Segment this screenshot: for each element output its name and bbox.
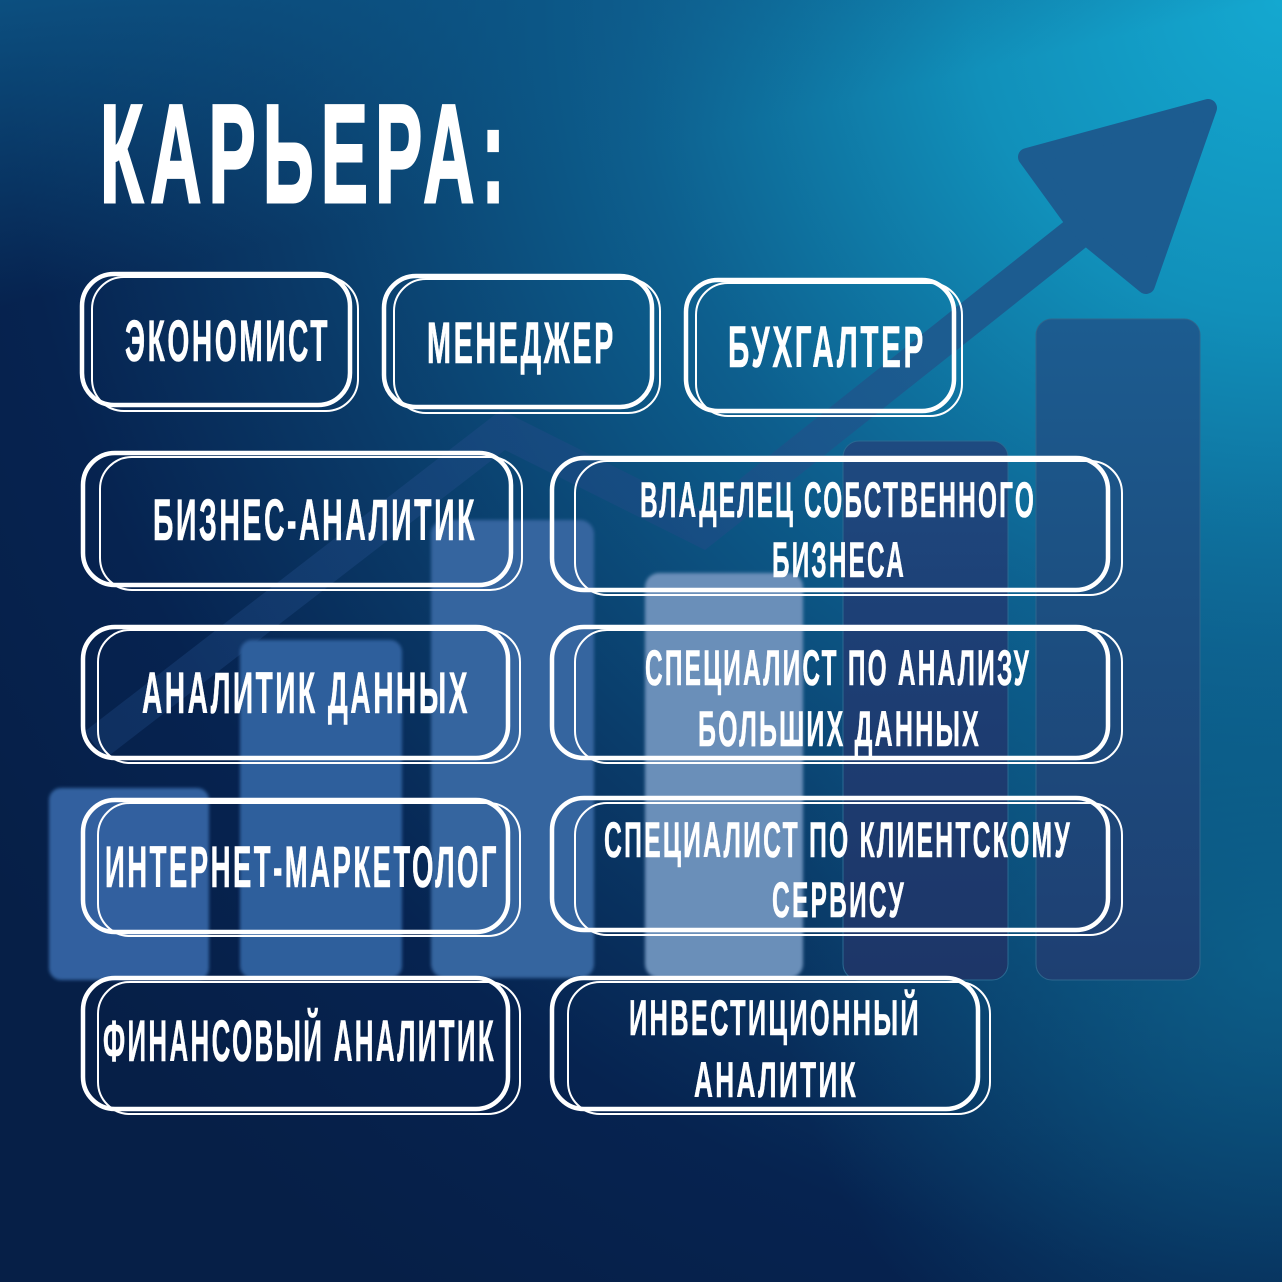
card: экономист (82, 274, 358, 411)
bar 1 (49, 788, 209, 980)
card: специалист по анализу больших данных: БОЛЬШИХ ДАННЫХ (698, 701, 981, 757)
card: инвестиционный аналитик: ИНВЕСТИЦИОННЫЙ (629, 989, 921, 1046)
card: специалист по анализу больших данных (552, 627, 1122, 763)
arrow head (1027, 108, 1208, 285)
card: экономист: ЭКОНОМИСТ (125, 309, 330, 374)
card: менеджер (384, 276, 660, 413)
card: владелец собственного бизнеса (552, 458, 1122, 595)
card: бухгалтер: БУХГАЛТЕР (728, 315, 926, 380)
card: аналитик данных: АНАЛИТИК ДАННЫХ (142, 661, 470, 726)
card: бухгалтер (686, 280, 962, 416)
card: бизнес-аналитик: БИЗНЕС-АНАЛИТИК (153, 488, 477, 553)
card: бизнес-аналитик (83, 453, 522, 590)
card: финансовый аналитик (83, 978, 520, 1114)
text: ИНТЕРНЕТ-МАРКЕТОЛОГ (105, 835, 499, 900)
bar 5 (843, 441, 1008, 980)
card: владелец собственного бизнеса: БИЗНЕСА (772, 532, 906, 588)
card: специалист по клиентскому сервису (552, 798, 1122, 935)
card: менеджер: МЕНЕДЖЕР (427, 311, 616, 376)
card: инвестиционный аналитик: АНАЛИТИК (694, 1052, 858, 1108)
card: специалист по клиентскому сервису: СЕРВИСУ (772, 872, 906, 928)
text: ФИНАНСОВЫЙ АНАЛИТИК (103, 1009, 496, 1074)
bar 2 (240, 640, 402, 978)
arrow line (95, 232, 1078, 745)
title: КАРЬЕРА: (100, 75, 512, 232)
card: интернет-маркетолог (83, 800, 520, 936)
card: инвестиционный аналитик (552, 978, 990, 1114)
bar 6 (1036, 319, 1200, 980)
background chart: rising arrow and bars (49, 108, 1208, 980)
card: аналитик данных (83, 627, 520, 763)
bar 3 (431, 520, 594, 978)
bar 4 (645, 573, 803, 978)
